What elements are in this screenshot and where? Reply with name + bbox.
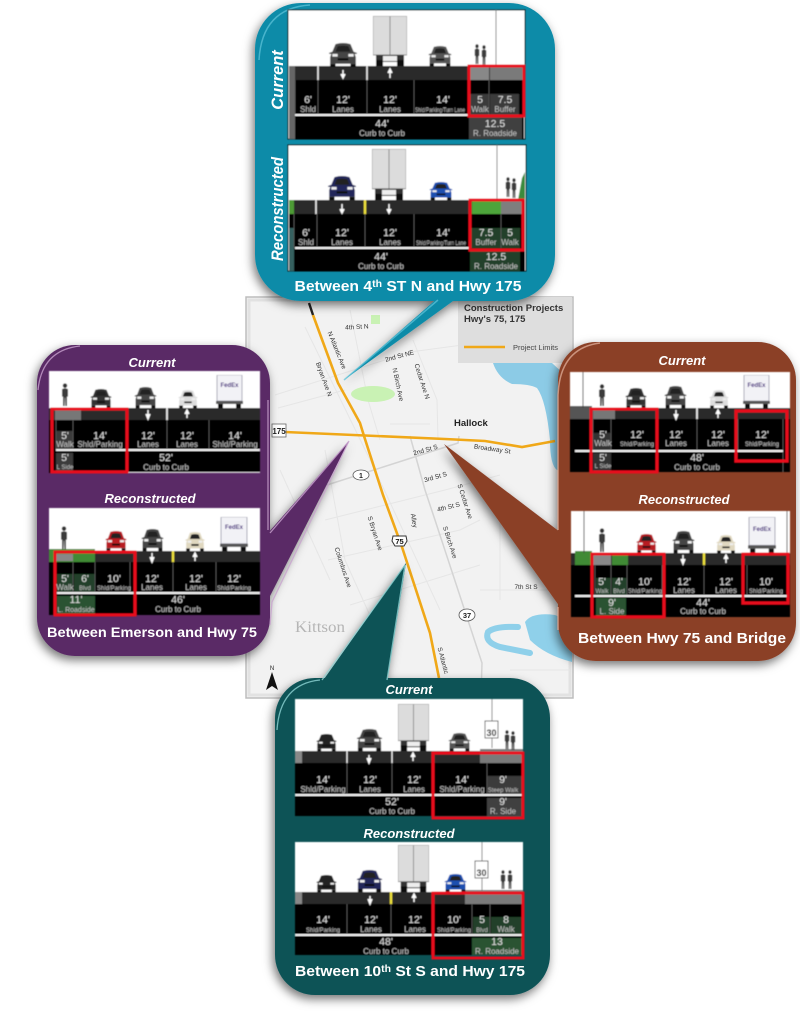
cross-section: reconstructed: Shld/Parking [749,589,783,595]
cross-section: current: 14' [455,774,469,786]
cross-section: current: 12.5 [485,118,505,130]
map street labels: 2nd St NE [384,349,415,364]
cross-section: reconstructed: 5' [598,576,606,588]
badge 75: 75 [395,537,404,546]
cross-section: reconstructed: Shld/Parking [437,928,471,934]
cross-section: current: 12' [669,429,683,441]
callout highlight [259,5,438,380]
cross-section: reconstructed: 12' [719,576,733,588]
panel title: th [381,964,391,975]
cross-section: current: Curb to Curb [674,463,720,472]
cross-section: current: 12' [630,429,644,441]
cross-section: reconstructed: L. Roadside [57,607,95,614]
legend: Construction Projects [464,303,563,314]
panel title: St S and Hwy 175 [391,963,525,980]
cross-section: current: Lanes [176,440,198,449]
cross-section: reconstructed: 10' [638,576,652,588]
cross-section: current: 12' [383,94,397,106]
cross-section: reconstructed: 9' [608,597,616,609]
cross-section: current: Shld/Parking [620,442,654,448]
cross-section: current: 9' [499,774,507,786]
cross-section: current: Curb to Curb [143,463,189,472]
panel title: Between 4 [294,278,369,295]
map street labels: Broadway St [473,443,511,456]
label: reconstructed rotated: Reconstructed [269,156,287,261]
cross-section: reconstructed: 44' [696,597,710,609]
cross-section: reconstructed [49,508,260,615]
cross-section: current: 5 [477,94,483,106]
map street labels: 7th St S [514,584,538,591]
cross-section: reconstructed: Blvd [79,586,91,592]
cross-section: current [295,699,523,818]
cross-section: reconstructed: Lanes [360,925,382,934]
cross-section: reconstructed: Shld/Parking [217,586,251,592]
cross-section: reconstructed: 12' [145,573,159,585]
cross-section: reconstructed: Lanes [404,925,426,934]
cross-section: current: 14' [228,430,242,442]
north arrow [266,666,278,690]
cross-section: reconstructed: 6' [302,227,310,239]
cross-section: reconstructed: Shld/Parking [628,589,662,595]
cross-section: reconstructed: 30 [476,868,487,878]
cross-section: current: Shld/Parking/Turn Lane [415,108,466,114]
legend: Hwy's 75, 175 [464,314,526,325]
cross-section: current [288,10,525,139]
cross-section: current [49,371,260,473]
badge 1 [353,470,369,480]
cross-section: current: Buffer [494,105,516,114]
cross-section: reconstructed: 10' [759,576,773,588]
cross-section: reconstructed: 5 [479,914,485,926]
panel: right, between Hwy 75 and Bridge [444,342,796,661]
cross-section: current: Shld/Parking [300,785,346,794]
water: river [487,627,530,653]
park north [371,315,380,324]
panel title: ST N and Hwy 175 [382,278,522,295]
highway 75 project limits [313,315,439,678]
cross-section: reconstructed: 12' [189,573,203,585]
map panel [246,297,573,698]
cross-section: reconstructed: 12' [227,573,241,585]
cross-section: reconstructed: Buffer [475,238,497,247]
callout shape [37,345,349,656]
map street labels: Bryan Ave N [314,361,333,398]
callout shape [444,342,796,661]
county label Kittson: Kittson [295,619,345,636]
cross-section: reconstructed: Shld/Parking [306,928,340,934]
cross-section: reconstructed [288,145,526,271]
label: reconstructed: Reconstructed [638,492,731,507]
highway 75 black lead-in [309,303,313,315]
water: north lake [493,363,565,472]
cross-section: reconstructed: Curb to Curb [363,947,409,956]
label: current: Current [129,355,176,370]
panel: bottom, between 10th St S and Hwy 175 [275,563,550,995]
cross-section: reconstructed: 12' [364,914,378,926]
water: south lake [525,614,572,662]
cross-section: reconstructed: 11' [70,594,82,606]
cross-section: current: 52' [159,452,173,464]
label: current: Current [386,682,433,697]
town label Hallock: Hallock [454,418,489,429]
cross-section: reconstructed: 12' [408,914,422,926]
map street labels: N Birch Ave [391,367,404,402]
cross-section: reconstructed: Walk [497,925,516,934]
cross-section: current: 6' [304,94,312,106]
cross-section: reconstructed: Curb to Curb [358,262,404,271]
cross-section: current: Shld/Parking [77,440,123,449]
cross-section: current: 5' [599,429,607,441]
cross-section: current: 14' [316,774,330,786]
cross-section: current [570,372,790,472]
map street labels: 4th St S [437,501,461,514]
cross-section: reconstructed: Lanes [715,586,737,595]
cross-section: reconstructed: Lanes [141,583,163,592]
cross-section: current: 12' [407,774,421,786]
cross-section: current: 12' [755,429,769,441]
cross-section: reconstructed: Shld/Parking [97,586,131,592]
cross-section: reconstructed: 8 [503,914,509,926]
map street labels: Alley [409,513,418,529]
cross-section: current: L Side [57,465,74,471]
cross-section: reconstructed: 12' [335,227,349,239]
cross-section: reconstructed: FedEx [225,525,244,531]
cross-section: current: 5' [61,452,69,464]
cross-section: reconstructed [295,842,523,958]
cross-section: reconstructed: Walk [501,238,520,247]
cross-section: current: Shld/Parking [745,442,779,448]
callout highlight [277,565,405,730]
cross-section: reconstructed: 12' [383,227,397,239]
panel: left, between Emerson and Hwy 75 [37,345,349,656]
cross-section: current: Walk [471,105,490,114]
cross-section: current: Curb to Curb [359,129,405,138]
local road grid [275,310,570,670]
badge 37: 37 [463,611,471,620]
map street labels: S Birch Ave [441,526,458,560]
label: reconstructed: Reconstructed [104,491,197,506]
panel title: th [372,279,382,290]
cross-section: reconstructed: Walk [595,589,610,595]
highway 175 project limits [285,432,555,447]
map street labels: 4th St N [345,323,369,332]
cross-section: current: 12' [711,429,725,441]
cross-section: reconstructed: Blvd [476,928,488,934]
map street labels: 3rd St S [423,471,448,484]
cross-section: current: R. Roadside [473,129,518,138]
cross-section: reconstructed [571,511,790,617]
panel title: Between 10 [295,963,378,980]
cross-section: current: Steep Walk [488,788,519,794]
cross-section: reconstructed: 6' [81,573,89,585]
cross-section: reconstructed: Lanes [673,586,695,595]
cross-section: current: 30 [486,728,497,738]
label: current: Current [659,353,706,368]
badge 175: 175 [272,427,286,436]
county road 1 and 37 [327,436,482,697]
map street labels: S Bryan Ave [366,515,383,552]
callout shape [255,3,555,380]
cross-section: reconstructed: 4' [615,576,623,588]
cross-section: current: Lanes [332,105,354,114]
cross-section: reconstructed: Blvd [613,589,625,595]
map street labels: S Cedar Ave [455,483,473,520]
cross-section: reconstructed: Lanes [379,238,401,247]
cross-section: current: 12' [336,94,350,106]
cross-section: reconstructed: 46' [171,594,185,606]
cross-section: reconstructed: 5 [507,227,513,239]
panel title: Between Emerson and Hwy 75 [47,624,257,640]
cross-section: current: 5' [599,452,607,464]
cross-section: current: R. Side [490,807,517,816]
callout shape [275,563,550,995]
badge 75 [392,536,407,546]
cross-section: current: Lanes [403,785,425,794]
cross-section: reconstructed: 5' [61,573,69,585]
cross-section: current: Walk [594,439,613,448]
cross-section: current: 14' [93,430,107,442]
cross-section: current: Lanes [665,439,687,448]
cross-section: current: L Side [595,464,612,470]
cross-section: current: FedEx [747,383,766,389]
cross-section: reconstructed: 10' [107,573,121,585]
cross-section: reconstructed: Shld/Parking/Turn Lane [416,241,467,247]
cross-section: current: Shld/Parking [212,440,258,449]
cross-section: reconstructed: Lanes [185,583,207,592]
cross-section: reconstructed: 44' [374,251,388,263]
cross-section: current: Shld [300,105,316,114]
cross-section: reconstructed: Curb to Curb [680,607,726,616]
cross-section: reconstructed: FedEx [753,527,772,533]
legend: Project Limits [513,343,558,352]
cross-section: current: 5' [61,430,69,442]
cross-section: current: 12' [363,774,377,786]
cross-section: current: 12' [180,430,194,442]
cross-section: reconstructed: 12.5 [486,251,506,263]
panel title: Between Hwy 75 and Bridge [578,631,786,647]
cross-section: current: 9' [499,796,507,808]
park [351,386,395,402]
cross-section: current: Lanes [379,105,401,114]
badge 175 [272,424,286,437]
cross-section: current: Lanes [707,439,729,448]
cross-section: current: 14' [436,94,450,106]
callout highlight [558,343,600,630]
cross-section: reconstructed: Lanes [331,238,353,247]
cross-section: reconstructed: 12' [677,576,691,588]
cross-section: current: 12' [141,430,155,442]
cross-section: reconstructed: L. Side [600,607,625,616]
cross-section: reconstructed: Shld [298,238,314,247]
cross-section: current: Lanes [359,785,381,794]
cross-section: reconstructed: R. Roadside [475,947,520,956]
cross-section: current: Shld/Parking [439,785,485,794]
cross-section: current: 44' [375,118,389,130]
map street labels: N Atlantic Ave [326,331,347,371]
cross-section: reconstructed: R. Roadside [474,262,519,271]
panel: top, between 4th St N and Hwy 175 [255,3,555,380]
label: reconstructed: Reconstructed [363,826,456,841]
cross-section: current: 7.5 [498,94,512,106]
badge 37 [459,609,475,621]
cross-section: current: 52' [385,796,399,808]
label: current rotated: Current [269,49,287,110]
legend [458,297,572,363]
cross-section: reconstructed: 7.5 [479,227,493,239]
cross-section: reconstructed: 14' [316,914,330,926]
map street labels: 2nd St S [413,444,439,457]
cross-section: reconstructed: 14' [436,227,450,239]
badge 1: 1 [359,473,363,480]
map street labels: Columbus Ave [333,547,352,589]
callout highlight [38,346,349,625]
map street labels: Cedar Ave N [412,363,431,400]
north arrow: N [270,666,274,672]
cross-section: reconstructed: 10' [447,914,461,926]
cross-section: reconstructed: 13 [491,936,503,948]
cross-section: reconstructed: Walk [56,583,75,592]
cross-section: reconstructed: 48' [379,936,393,948]
cross-section: current: Lanes [137,440,159,449]
cross-section: current: Walk [56,440,75,449]
cross-section: current: 48' [690,452,704,464]
cross-section: current: FedEx [220,383,239,389]
cross-section: reconstructed: Curb to Curb [155,605,201,614]
map street labels [314,323,538,675]
cross-section: current: Curb to Curb [369,807,415,816]
map street labels: S Atlantic [436,647,450,675]
